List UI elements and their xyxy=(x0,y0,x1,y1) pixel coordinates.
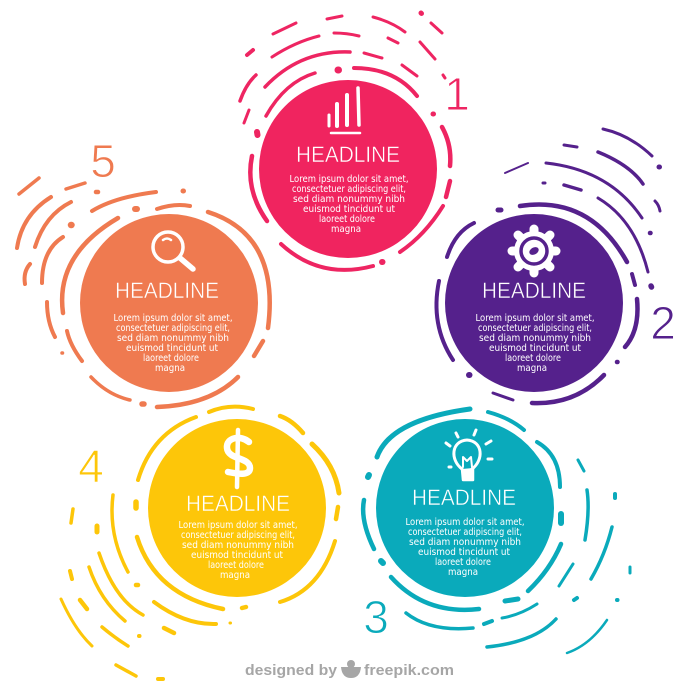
text block: Lorem ipsum dolor sit amet, xyxy=(290,174,409,185)
panel: step 5 orange xyxy=(17,135,270,407)
swirl strokes teal xyxy=(363,409,630,653)
text block xyxy=(476,313,595,374)
text block: sed diam nonummy nibh xyxy=(293,194,405,205)
swirl strokes purple xyxy=(436,129,660,403)
icon: bar chart xyxy=(329,88,360,133)
text block: euismod tincidunt ut xyxy=(303,204,395,215)
icon: light bulb xyxy=(446,430,492,480)
circle purple xyxy=(445,214,623,392)
text block: laoreet dolore xyxy=(208,560,264,571)
heading: HEADLINE xyxy=(482,278,586,303)
text block xyxy=(290,174,409,235)
text block xyxy=(114,313,233,374)
swirl strokes orange xyxy=(17,178,270,407)
text block: sed diam nonummy nibh xyxy=(117,333,229,344)
text block xyxy=(178,520,298,581)
circle yellow xyxy=(148,419,326,597)
text block: euismod tincidunt ut xyxy=(418,547,510,558)
heading: HEADLINE xyxy=(412,485,516,510)
text block: magna xyxy=(220,570,250,581)
icon: freepik mascot xyxy=(341,660,361,678)
text block: laoreet dolore xyxy=(319,214,375,225)
text block: sed diam nonummy nibh xyxy=(479,333,591,344)
panel: step 3 teal xyxy=(363,409,630,653)
text block: euismod tincidunt ut xyxy=(489,343,581,354)
text block: sed diam nonummy nibh xyxy=(182,540,294,551)
text block: consectetuer adipiscing elit, xyxy=(116,323,230,334)
panel: step 4 yellow xyxy=(61,407,339,679)
number 5: 5 xyxy=(90,135,116,187)
text block: consectetuer adipiscing elit, xyxy=(408,527,522,538)
icon: gear xyxy=(512,229,556,273)
heading: HEADLINE xyxy=(186,491,290,516)
text block: magna xyxy=(517,363,547,374)
text block: magna xyxy=(331,224,361,235)
text block: consectetuer adipiscing elit, xyxy=(181,530,295,541)
credit text right: freepik.com xyxy=(364,662,454,679)
panel: step 2 purple xyxy=(436,129,676,403)
heading: HEADLINE xyxy=(115,278,219,303)
panel: step 1 pink xyxy=(240,13,470,270)
number 3: 3 xyxy=(363,591,389,643)
text block: euismod tincidunt ut xyxy=(191,550,283,561)
text block: Lorem ipsum dolor sit amet, xyxy=(476,313,595,324)
text block: consectetuer adipiscing elit, xyxy=(292,184,406,195)
swirl strokes pink xyxy=(240,13,450,270)
number 4: 4 xyxy=(78,440,104,492)
icon: dollar sign xyxy=(227,430,250,487)
text block: Lorem ipsum dolor sit amet, xyxy=(406,517,525,528)
text block: magna xyxy=(155,363,185,374)
text block: euismod tincidunt ut xyxy=(126,343,218,354)
text block: laoreet dolore xyxy=(505,353,561,364)
text block: laoreet dolore xyxy=(435,557,491,568)
text block: laoreet dolore xyxy=(143,353,199,364)
heading: HEADLINE xyxy=(296,142,400,167)
text block: magna xyxy=(448,567,478,578)
text block: Lorem ipsum dolor sit amet, xyxy=(114,313,233,324)
text block: Lorem ipsum dolor sit amet, xyxy=(178,520,298,531)
circle pink xyxy=(259,80,437,258)
number 2: 2 xyxy=(650,297,676,349)
text block xyxy=(406,517,525,578)
circle teal xyxy=(376,419,554,597)
number 1: 1 xyxy=(444,68,470,120)
swirl strokes yellow xyxy=(61,407,339,679)
icon: magnifying glass xyxy=(153,232,193,269)
text block: sed diam nonummy nibh xyxy=(409,537,521,548)
credit text left: designed by xyxy=(245,662,338,679)
footer credit xyxy=(245,660,454,679)
circle orange xyxy=(80,214,258,392)
text block: consectetuer adipiscing elit, xyxy=(478,323,592,334)
